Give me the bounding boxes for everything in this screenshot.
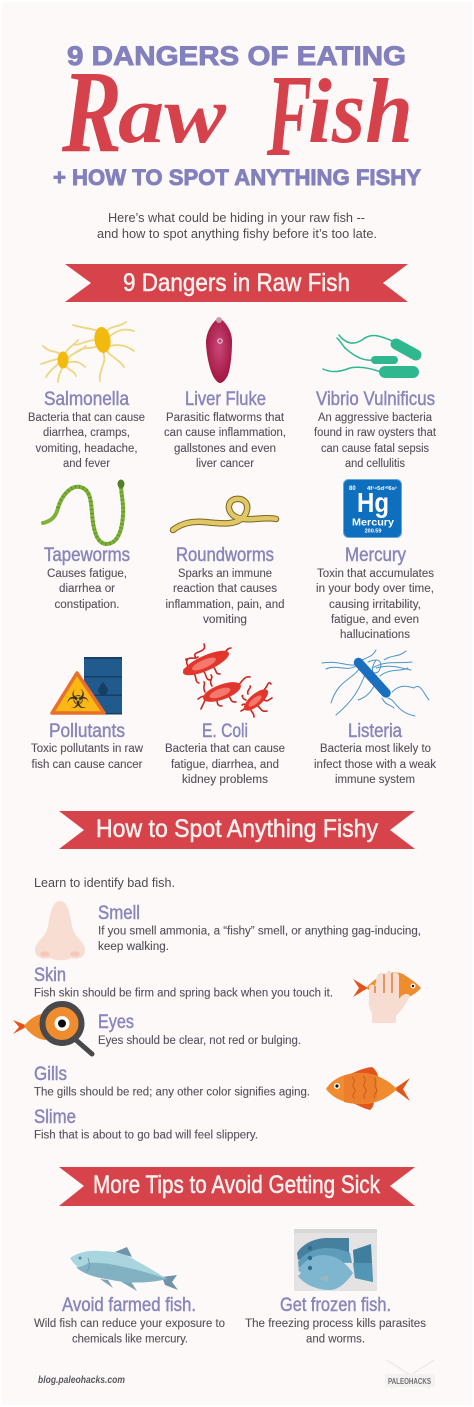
description <box>314 412 437 470</box>
banner: more tips: More Tips to Avoid Getting Sick <box>93 1171 380 1199</box>
description: chemicals like mercury. <box>72 1334 188 1346</box>
description: vomiting, headache, <box>36 443 138 455</box>
description: can cause inflammation, <box>164 427 286 439</box>
description <box>98 926 421 953</box>
banner: 9 dangers in raw fish: 9 Dangers in Raw Fish <box>123 269 350 297</box>
description: If you smell ammonia, a “fishy” smell, or anything gag-inducing, <box>98 926 421 938</box>
description: causing irritability, <box>329 599 421 611</box>
logo: paleohacks: PALEOHACKS <box>388 1377 432 1386</box>
banner: more tips <box>59 1167 415 1206</box>
description: Bacteria that can cause <box>165 743 285 755</box>
icon: salmonella bacteria <box>41 322 134 382</box>
panel: eyes <box>13 1004 301 1054</box>
icon: mercury periodic element: Mercury <box>352 518 394 528</box>
description: Fish that is about to go bad will feel slippery. <box>34 1130 258 1142</box>
icon: mercury periodic element: Hg <box>357 487 389 518</box>
description: hallucinations <box>340 629 410 641</box>
icon: frozen fish tray <box>294 1229 377 1291</box>
description: liver cancer <box>196 458 254 470</box>
description: immune system <box>335 774 415 786</box>
title: + HOW TO SPOT ANYTHING FISHY <box>53 165 421 190</box>
intro text <box>97 211 377 241</box>
icon: mercury periodic element: 200.59 <box>365 528 381 534</box>
icon: tapeworm <box>43 480 124 544</box>
intro text: Here’s what could be hiding in your raw fish -- <box>108 211 365 225</box>
description: Eyes should be clear, not red or bulging. <box>98 1035 301 1047</box>
description <box>165 743 285 786</box>
panel: e. coli <box>165 644 285 786</box>
description <box>314 743 436 786</box>
description: The gills should be red; any other color signifies aging. <box>34 1086 310 1098</box>
heading: E. Coli <box>202 721 248 742</box>
title <box>53 41 421 190</box>
heading: Mercury <box>345 545 406 566</box>
description: Bacteria most likely to <box>320 743 431 755</box>
heading: Roundworms <box>176 545 274 566</box>
panel: tapeworms <box>43 480 130 611</box>
icon: hand touching fish <box>353 971 421 1023</box>
icon: roundworm <box>173 499 276 530</box>
icon: mercury periodic element: 4f¹⁴5d¹⁰6s² <box>367 486 397 492</box>
icon: farmed fish <box>70 1247 178 1291</box>
heading: Liver Fluke <box>185 389 266 410</box>
description: in your body over time, <box>316 583 434 595</box>
description: and cellulitis <box>345 458 405 470</box>
description: The freezing process kills parasites <box>245 1318 426 1330</box>
panel: smell <box>35 901 421 960</box>
description: Sparks an immune <box>178 568 272 580</box>
description: Causes fatigue, <box>47 568 127 580</box>
icon: e. coli bacteria <box>180 644 272 717</box>
title: F <box>250 50 312 181</box>
description: diarrhea, cramps, <box>43 427 130 439</box>
icon: nose <box>35 901 85 960</box>
heading: Salmonella <box>44 389 129 410</box>
heading: Slime <box>34 1107 76 1128</box>
heading: Skin <box>34 965 66 986</box>
description: Bacteria that can cause <box>28 412 145 424</box>
icon: vibrio bacteria <box>323 335 416 372</box>
heading: Pollutants <box>49 721 125 742</box>
description: Wild fish can reduce your exposure to <box>34 1318 225 1330</box>
description: and fever <box>63 458 110 470</box>
heading: Tapeworms <box>44 545 130 566</box>
description: fatigue, and even <box>331 614 419 626</box>
description: fatigue, diarrhea, and <box>171 759 279 771</box>
title: ish <box>308 60 413 162</box>
icon: mercury periodic element <box>344 480 402 538</box>
footer url: blog.paleohacks.com <box>38 1374 125 1386</box>
description: keep walking. <box>98 941 169 953</box>
description: An aggressive bacteria <box>318 412 433 424</box>
icon: mercury periodic element: 80 <box>349 486 356 492</box>
description: Toxin that accumulates <box>317 568 434 580</box>
title: R <box>61 46 122 177</box>
description: inflammation, pain, and <box>166 599 284 611</box>
panel: salmonella <box>28 322 145 470</box>
panel: vibrio vulnificus <box>314 335 437 470</box>
description: found in raw oysters that <box>314 427 437 439</box>
description: gallstones and even <box>174 443 276 455</box>
panel: skin <box>34 965 421 1023</box>
description: infect those with a weak <box>314 759 436 771</box>
description <box>166 568 284 626</box>
panel: liver fluke <box>164 317 286 470</box>
panel: mercury <box>316 480 434 641</box>
panel: pollutants <box>31 657 144 771</box>
description <box>245 1318 426 1346</box>
description <box>164 412 286 470</box>
banner: how to spot anything fishy <box>59 811 415 849</box>
description <box>28 412 145 470</box>
title: 9 DANGERS OF EATING <box>67 41 406 71</box>
heading: Smell <box>98 903 140 924</box>
description: can cause fatal sepsis <box>321 443 429 455</box>
heading: Listeria <box>348 721 402 742</box>
description: and worms. <box>306 1334 365 1346</box>
description: Toxic pollutants in raw <box>31 743 144 755</box>
icon: orange fish <box>326 1067 410 1110</box>
description <box>316 568 434 641</box>
icon: liver fluke <box>206 317 232 383</box>
description <box>34 1318 225 1346</box>
icon: fish under magnifying glass <box>13 1004 92 1054</box>
banner: how to spot anything fishy: How to Spot Anything Fishy <box>96 815 378 843</box>
intro: learn to identify: Learn to identify bad fish. <box>34 876 175 890</box>
icon: listeria bacteria <box>322 650 429 716</box>
heading: Gills <box>34 1064 67 1085</box>
banner: 9 dangers in raw fish <box>65 264 408 302</box>
description: diarrhea or <box>59 583 115 595</box>
description: Parasitic flatworms that <box>166 412 285 424</box>
panel: listeria <box>314 650 436 786</box>
logo: paleohacks <box>385 1360 435 1388</box>
panel: get frozen fish <box>245 1229 426 1346</box>
description <box>31 743 144 771</box>
description: fish can cause cancer <box>32 759 143 771</box>
heading: Vibrio Vulnificus <box>316 389 435 410</box>
description: vomiting <box>203 614 247 626</box>
heading: Avoid farmed fish. <box>62 1295 196 1316</box>
description: kidney problems <box>182 774 268 786</box>
icon: barrel and hazard sign: ☣ <box>66 685 90 715</box>
title: aw <box>118 69 226 160</box>
description: reaction that causes <box>173 583 277 595</box>
panel: slime <box>34 1107 258 1142</box>
heading: Eyes <box>98 1012 134 1033</box>
panel: gills <box>34 1064 410 1110</box>
intro text: and how to spot anything fishy before it’s too late. <box>97 227 377 241</box>
panel: avoid farmed fish <box>34 1247 225 1346</box>
description: constipation. <box>54 599 120 611</box>
description: Fish skin should be firm and spring back when you touch it. <box>34 988 333 1000</box>
description <box>47 568 127 611</box>
panel: roundworms <box>166 499 284 626</box>
heading: Get frozen fish. <box>280 1295 391 1316</box>
